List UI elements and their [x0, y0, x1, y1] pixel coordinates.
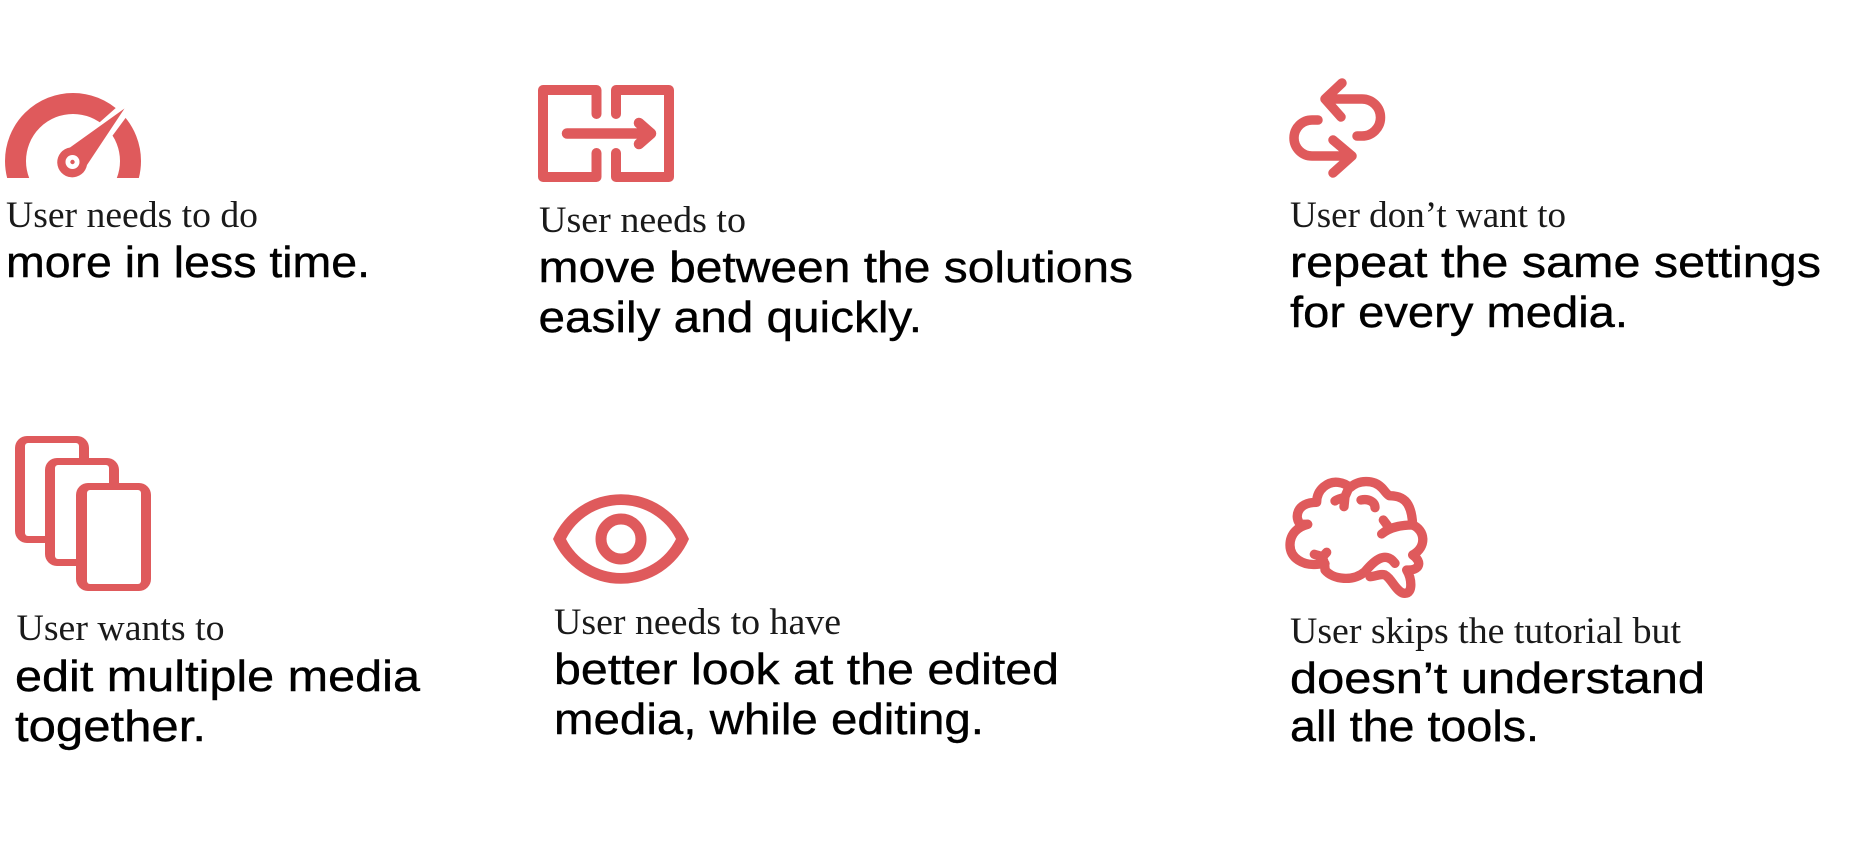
text: goal two: move between the solutions [538, 243, 1133, 292]
text: need three: User don’t want to [1290, 195, 1566, 236]
panel: more in less time [6, 98, 370, 287]
icon: brain [1290, 482, 1423, 593]
panel: edit multiple media [15, 436, 421, 751]
icon: stacked pages [15, 436, 151, 591]
icon: eye [553, 494, 689, 584]
text: goal six: doesn’t understand [1290, 654, 1705, 703]
panel: understand the tools [1290, 482, 1705, 751]
text: goal two second line: easily and quickly. [538, 293, 922, 342]
text: goal four: edit multiple media [15, 652, 421, 701]
panel: repeat settings [1290, 83, 1821, 337]
panel: move between solutions [538, 90, 1133, 342]
icon: split panels with arrow [543, 90, 669, 177]
text: need six: User skips the tutorial but [1290, 611, 1682, 652]
text: need one: User needs to do [6, 195, 258, 236]
text: goal three: repeat the same settings [1290, 238, 1821, 287]
text: goal three second line: for every media. [1290, 288, 1628, 337]
text: need two: User needs to [539, 200, 746, 241]
text: goal five: better look at the edited [554, 645, 1059, 694]
icon: looping arrows [1294, 83, 1380, 173]
text: need five: User needs to have [554, 602, 841, 643]
text: goal one: more in less time. [6, 238, 370, 287]
text: goal four second line: together. [15, 702, 206, 751]
text: goal six second line: all the tools. [1290, 702, 1539, 751]
panel: better look at media [553, 494, 1059, 744]
text: goal five second line: media, while editing. [554, 695, 984, 744]
text: need four: User wants to [16, 608, 224, 649]
icon: speedometer gauge [5, 93, 141, 178]
